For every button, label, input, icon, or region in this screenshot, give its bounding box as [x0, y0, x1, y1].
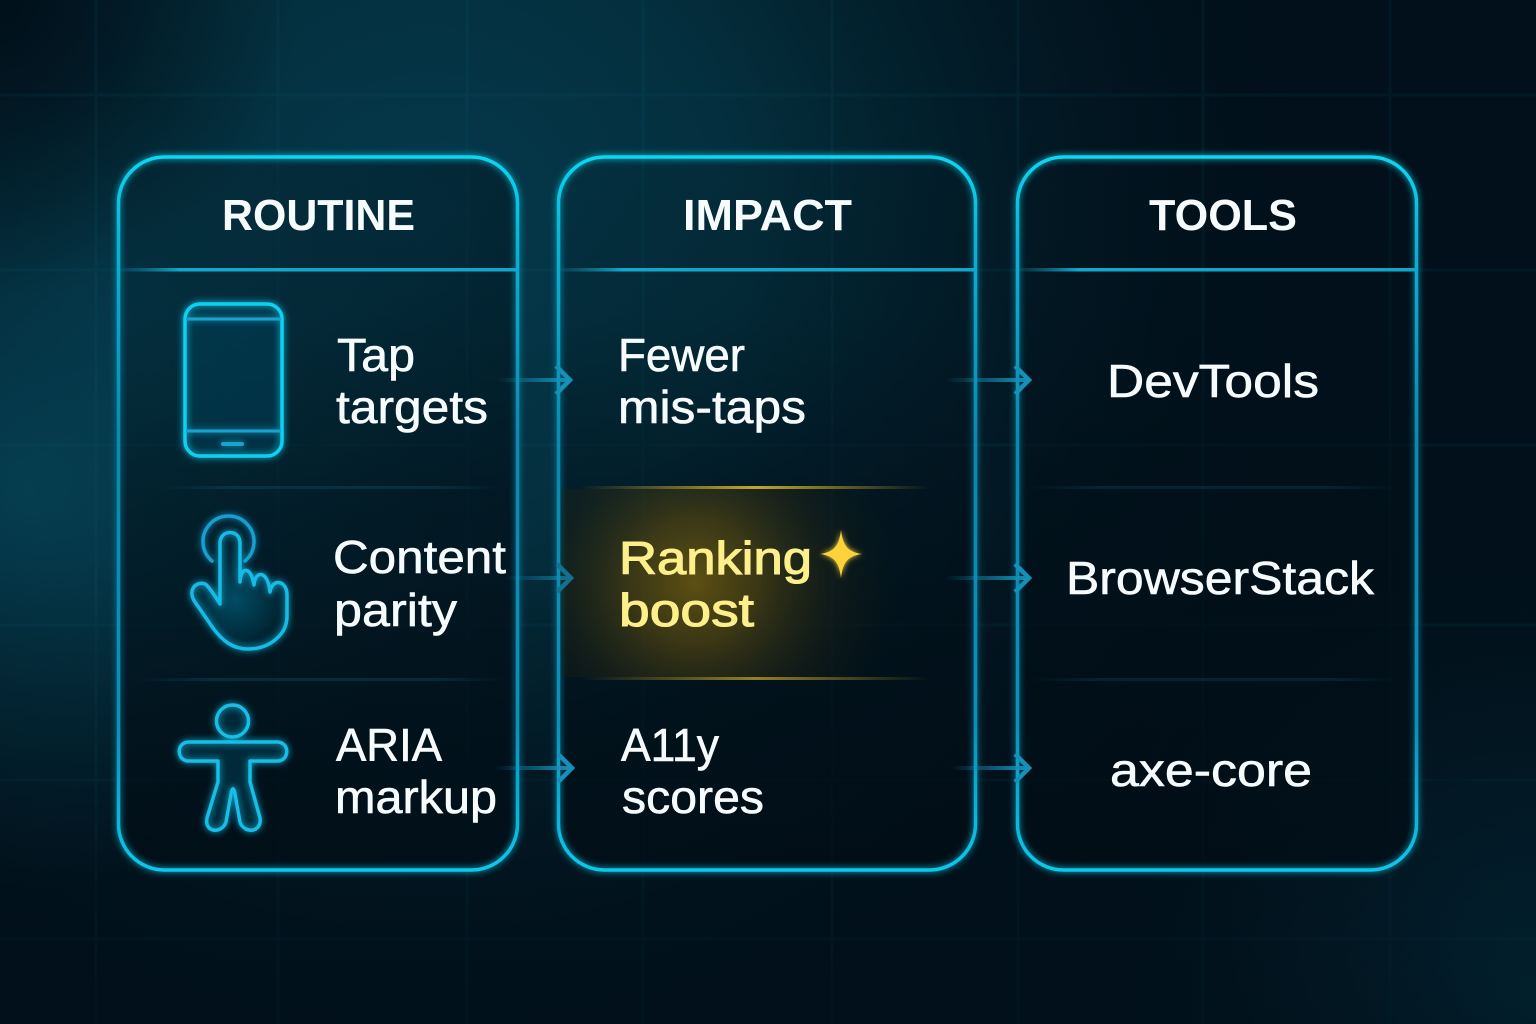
icon: phone [185, 304, 282, 456]
heading: impact: IMPACT [683, 191, 852, 240]
arrow: aria markup to a11y scores [496, 754, 572, 782]
divider: impact header [560, 268, 974, 272]
arrow: a11y scores to axe-core [950, 754, 1029, 782]
text: aria markup: markup [335, 771, 497, 823]
icon: person [179, 705, 287, 830]
text: content parity: Content [333, 531, 506, 583]
highlight: ranking boost glow [561, 489, 973, 677]
icon: sparkle [820, 530, 862, 578]
text: ranking boost: Ranking [619, 532, 812, 584]
text: content parity [333, 531, 506, 636]
text: browserstack: BrowserStack [1066, 552, 1375, 604]
arrow: content parity to ranking boost [505, 564, 571, 592]
text: a11y scores [621, 719, 764, 823]
text: tap targets: targets [336, 381, 488, 433]
heading: tools: TOOLS [1149, 191, 1297, 240]
text: devtools: DevTools [1107, 355, 1319, 407]
text: aria markup: ARIA [336, 719, 442, 771]
heading: routine: ROUTINE [222, 191, 415, 240]
panel: impact [558, 157, 976, 870]
icon: tapping hand [192, 516, 287, 649]
text: fewer mis-taps: Fewer [618, 329, 745, 381]
text: tap targets: Tap [337, 329, 415, 381]
text: ranking boost: boost [619, 584, 754, 636]
divider: gold top [580, 486, 930, 489]
text: fewer mis-taps [618, 329, 806, 433]
text: a11y scores: scores [622, 771, 764, 823]
divider: tools header [1019, 268, 1415, 272]
text: fewer mis-taps: mis-taps [618, 381, 806, 433]
text: aria markup [335, 719, 497, 823]
row divider: routine 1 [160, 486, 500, 489]
panel: tools [1018, 157, 1416, 870]
text: axe-core: axe-core [1110, 744, 1312, 796]
row divider: tools 2 [1030, 678, 1400, 681]
row divider: tools 1 [1030, 486, 1400, 489]
text: a11y scores: A11y [621, 719, 719, 771]
row divider: routine 2 [135, 678, 505, 681]
text: tap targets [336, 329, 488, 433]
divider: gold bottom [580, 677, 930, 680]
divider: routine header [120, 268, 516, 272]
arrow: fewer mis-taps to devtools [945, 366, 1029, 394]
panel: routine [118, 157, 518, 870]
arrow: ranking boost to browserstack [945, 564, 1029, 592]
text: ranking boost [619, 532, 812, 636]
arrow: tap targets to fewer mis-taps [498, 366, 570, 394]
text: content parity: parity [334, 584, 457, 636]
